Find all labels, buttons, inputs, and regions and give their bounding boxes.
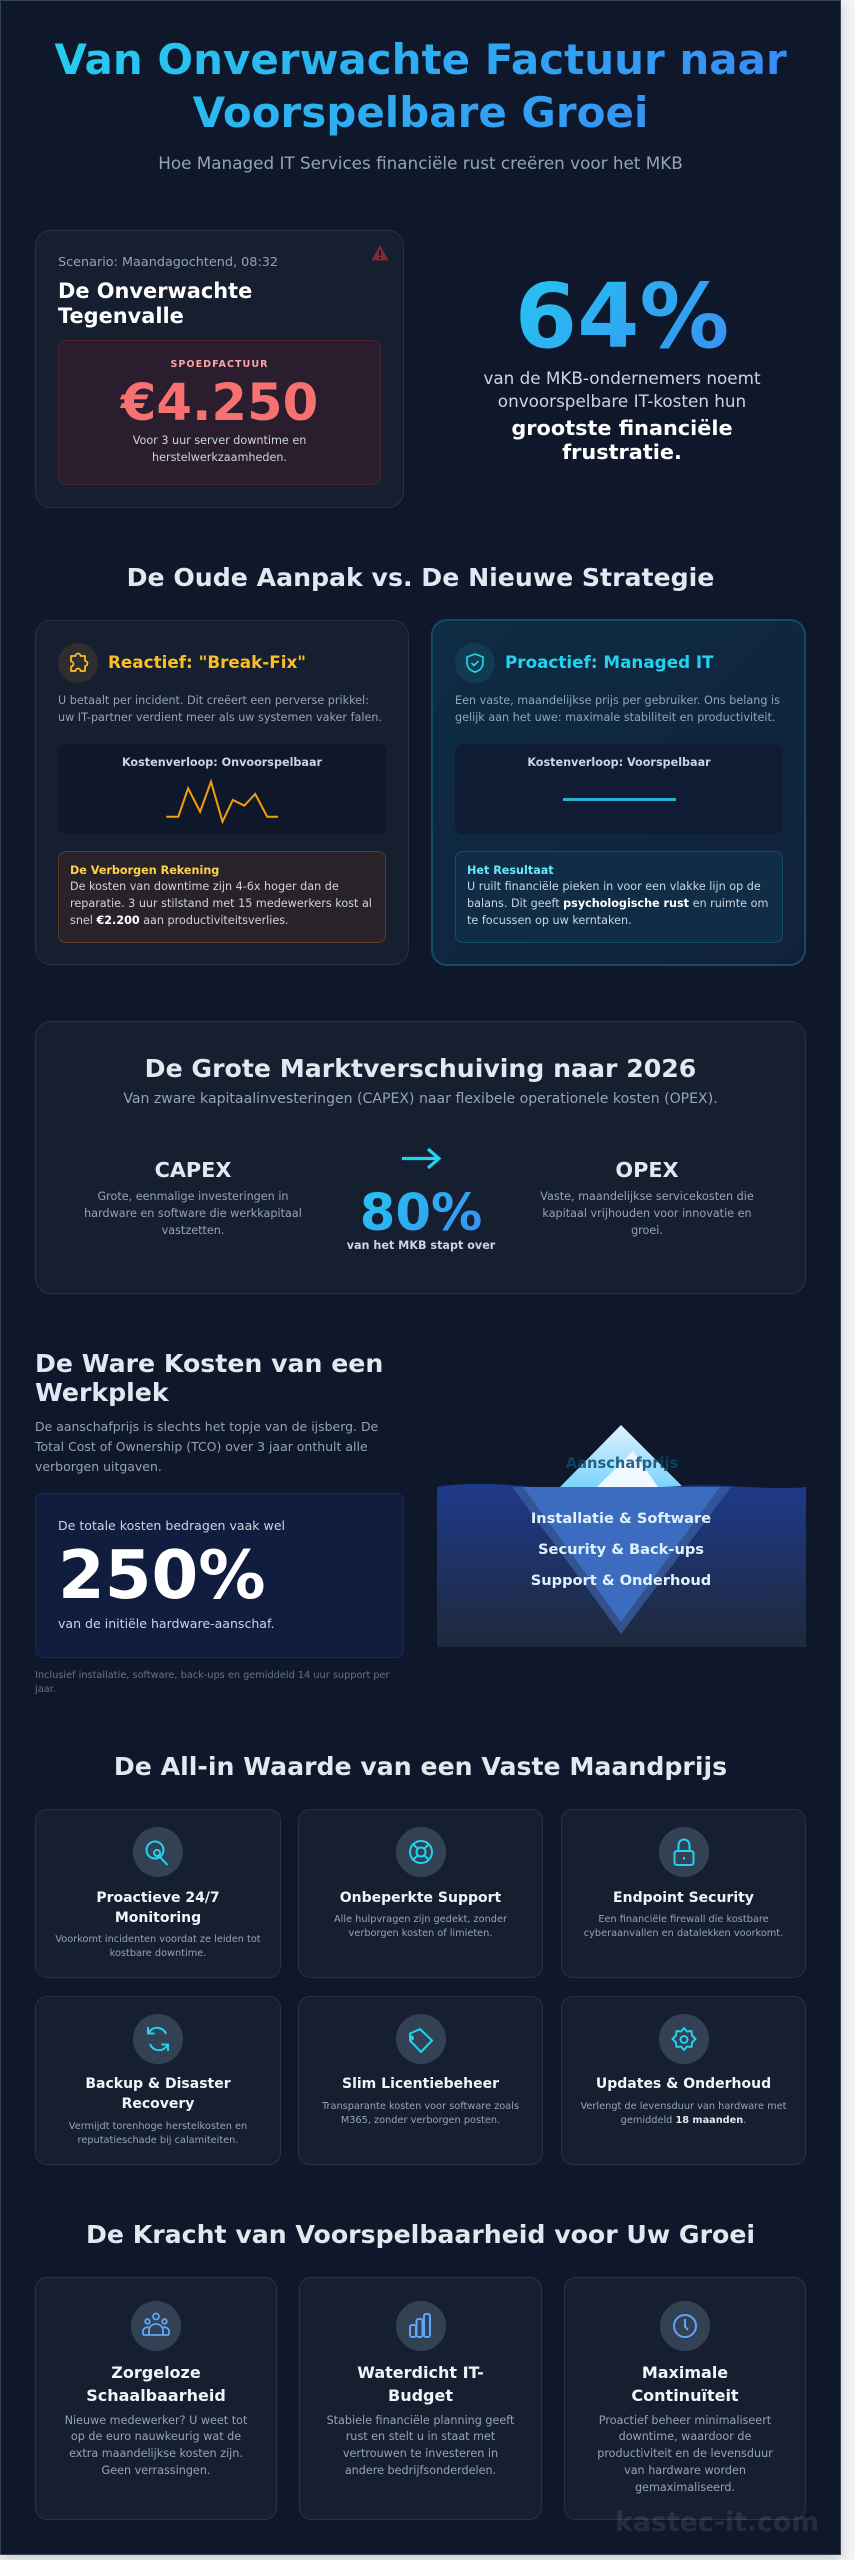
heading: true workplace cost	[35, 1349, 383, 1407]
description: Geen verrassingen.	[102, 2464, 210, 2477]
title	[96, 1890, 220, 1926]
description	[55, 1934, 261, 1959]
description: Verlengt de levensduur van hardware met	[581, 2101, 786, 2112]
title: Recovery	[122, 2096, 194, 2112]
result callout	[455, 851, 783, 943]
callout text	[70, 864, 372, 927]
callout text: De Verborgen Rekening	[70, 864, 219, 876]
CAPEX text: vastzetten.	[162, 1224, 224, 1237]
panel: market shift	[35, 1021, 806, 1294]
description: verborgen kosten of limieten.	[349, 1928, 492, 1939]
card: continuity	[564, 2277, 806, 2520]
description	[65, 2414, 248, 2477]
flat line	[563, 798, 676, 801]
card: budget	[299, 2277, 542, 2520]
description	[68, 2121, 247, 2146]
description	[322, 2101, 519, 2126]
watermark: kastec-it.com	[615, 2507, 819, 2538]
cost chart: unpredictable	[58, 744, 386, 834]
stat text: onvoorspelbare IT-kosten hun	[498, 391, 746, 411]
icon: magnifier	[133, 1827, 183, 1877]
reactive description	[58, 694, 382, 724]
title: Maximale	[642, 2363, 728, 2382]
subtitle: Hoe Managed IT Services financiële rust creëren voor het MKB	[158, 153, 683, 173]
description: extra maandelijkse kosten zijn.	[69, 2447, 243, 2460]
title: Waterdicht IT-	[357, 2363, 484, 2382]
iceberg labels: Support & Onderhoud	[531, 1572, 711, 1589]
description: reputatieschade bij calamiteiten.	[78, 2135, 238, 2146]
arrow	[402, 1148, 441, 1170]
title: Backup & Disaster	[85, 2076, 231, 2092]
callout text: balans. Dit geeft psychologische rust en ruimte om	[467, 897, 768, 910]
callout text: U ruilt financiële pieken in voor een vlakke lijn op de	[467, 880, 761, 893]
panel: 250 percent	[35, 1493, 404, 1658]
invoice note	[132, 434, 306, 464]
description: kostbare downtime.	[110, 1948, 206, 1959]
description: Voorkomt incidenten voordat ze leiden tot	[55, 1934, 261, 1945]
CAPEX text	[84, 1190, 302, 1237]
reactive title: Reactief: "Break-Fix"	[108, 652, 306, 672]
title	[631, 2363, 739, 2404]
card: scalability	[35, 2277, 277, 2520]
title	[357, 2363, 484, 2404]
iceberg labels: Security & Back-ups	[538, 1541, 704, 1558]
80 percent stat: 80%	[360, 1183, 482, 1243]
scenario label: Scenario: Maandagochtend, 08:32	[58, 255, 278, 270]
callout text: snel €2.200 aan productiviteitsverlies.	[70, 914, 289, 927]
card: support	[298, 1809, 543, 1978]
reactive description: uw IT-partner verdient meer als uw systemen vaker falen.	[58, 711, 382, 724]
TCO description: Total Cost of Ownership (TCO) over 3 jaar onthult alle	[35, 1439, 368, 1454]
footnote: Inclusief installatie, software, back-ups en gemiddeld 14 uur support per	[35, 1670, 390, 1681]
stat emphasis	[511, 416, 733, 464]
proactive title: Proactief: Managed IT	[505, 652, 714, 672]
chart label: Kostenverloop: Voorspelbaar	[527, 756, 711, 769]
icon: puzzle	[58, 643, 98, 683]
proactive description: Een vaste, maandelijkse prijs per gebruiker. Ons belang is	[455, 694, 780, 707]
big number	[451, 259, 793, 375]
proactive description	[455, 694, 780, 724]
description	[597, 2414, 773, 2494]
icon: tag	[396, 2014, 446, 2064]
description: Transparante kosten voor software zoals	[322, 2101, 519, 2112]
description: op de euro nauwkeurig wat de	[71, 2430, 241, 2443]
description: vertrouwen te investeren in	[343, 2447, 498, 2460]
statistic: 64 percent	[483, 265, 761, 464]
heading: true workplace cost: De Ware Kosten van een	[35, 1349, 383, 1378]
cost chart: predictable	[455, 744, 783, 834]
stat emphasis: grootste financiële	[511, 416, 733, 440]
card heading: De Onverwachte	[58, 278, 252, 302]
callout text: te focussen op uw kerntaken.	[467, 914, 632, 927]
title: Slim Licentiebeheer	[342, 2076, 499, 2092]
OPEX text: groei.	[631, 1224, 663, 1237]
card: backup	[35, 1996, 281, 2165]
stat text: van de MKB-ondernemers noemt	[483, 368, 761, 388]
title: Zorgeloze	[111, 2363, 201, 2382]
OPEX text	[540, 1190, 754, 1237]
invoice amount: €4.250	[121, 373, 318, 433]
lead text: De totale kosten bedragen vaak wel	[58, 1518, 285, 1533]
OPEX text: Vaste, maandelijkse servicekosten die	[540, 1190, 754, 1203]
big number: 250%	[58, 1536, 266, 1614]
heading: old vs new: De Oude Aanpak vs. De Nieuwe Strategie	[127, 563, 714, 592]
CAPEX column	[84, 1158, 302, 1237]
icon: refresh	[133, 2014, 183, 2064]
callout text: De kosten van downtime zijn 4-6x hoger dan de	[70, 880, 339, 893]
description: Nieuwe medewerker? U weet tot	[65, 2414, 247, 2427]
description	[584, 1914, 783, 1939]
follow text: van de initiële hardware-aanschaf.	[58, 1616, 274, 1631]
description: Alle hulpvragen zijn gedekt, zonder	[334, 1914, 507, 1925]
description: gemaximaliseerd.	[635, 2481, 735, 2494]
reactive description: U betaalt per incident. Dit creëert een perverse prikkel:	[58, 694, 369, 707]
invoice note: herstelwerkzaamheden.	[152, 451, 287, 464]
spiky line	[166, 778, 278, 824]
footnote	[34, 1670, 390, 1695]
iceberg labels	[531, 1455, 711, 1589]
icon: warning triangle	[372, 245, 388, 260]
title: Voorspelbare Groei	[193, 88, 648, 137]
title: Continuïteit	[631, 2386, 739, 2404]
TCO description: verborgen uitgaven.	[35, 1459, 162, 1474]
TCO description	[34, 1419, 378, 1474]
card: updates	[561, 1996, 806, 2165]
80 percent stat	[321, 1179, 521, 1247]
CAPEX text: Grote, eenmalige investeringen in	[97, 1190, 289, 1203]
iceberg labels: Aanschafprijs	[566, 1455, 679, 1472]
OPEX column	[540, 1158, 754, 1237]
title: Proactieve 24/7	[96, 1890, 220, 1906]
invoice note: Voor 3 uur server downtime en	[133, 434, 306, 447]
footnote: jaar.	[35, 1684, 56, 1695]
invoice label: SPOEDFACTUUR	[170, 359, 269, 370]
description: andere bedrijfsonderdelen.	[345, 2464, 496, 2477]
subheading: Van zware kapitaalinvesteringen (CAPEX) naar flexibele operationele kosten (OPEX).	[123, 1091, 718, 1107]
title: Van Onverwachte Factuur naar	[54, 35, 787, 84]
stat caption: van het MKB stapt over	[347, 1239, 495, 1252]
card: endpoint security	[561, 1809, 806, 1978]
heading: De Grote Marktverschuiving naar 2026	[145, 1054, 696, 1083]
heading: true workplace cost: Werkplek	[35, 1378, 169, 1407]
icon: shield	[455, 643, 495, 683]
heading: all-in value: De All-in Waarde van een Vaste Maandprijs	[114, 1752, 727, 1781]
title: Schaalbaarheid	[86, 2386, 226, 2404]
card: licences	[298, 1996, 543, 2165]
OPEX text: kapitaal vrijhouden voor innovatie en	[542, 1207, 752, 1220]
icon: padlock	[659, 1827, 709, 1877]
title: Updates & Onderhoud	[596, 2076, 771, 2092]
icon: gear	[659, 2014, 709, 2064]
description	[580, 2101, 786, 2126]
callout text: Het Resultaat	[467, 864, 554, 876]
card: monitoring	[35, 1809, 281, 1978]
description	[334, 1914, 507, 1939]
description: rust en stelt u in staat met	[346, 2430, 495, 2443]
callout text: reparatie. 3 uur stilstand met 15 medewerkers kost al	[70, 897, 372, 910]
emergency invoice box	[58, 340, 381, 485]
iceberg labels: Installatie & Software	[531, 1510, 711, 1527]
title: Onbeperkte Support	[340, 1890, 501, 1906]
panel: proactive	[431, 619, 806, 966]
description	[327, 2414, 514, 2477]
icon: clock	[660, 2301, 710, 2351]
panel: reactive	[35, 620, 409, 965]
title: Endpoint Security	[613, 1890, 754, 1906]
iceberg graphic	[437, 1425, 806, 1647]
description: van hardware worden	[624, 2464, 746, 2477]
title	[0, 33, 841, 139]
description: productiviteit en de levensduur	[597, 2447, 773, 2460]
description: Stabiele financiële planning geeft	[327, 2414, 514, 2427]
chart label: Kostenverloop: Onvoorspelbaar	[122, 756, 322, 769]
icon: team	[131, 2301, 181, 2351]
title: Monitoring	[115, 1910, 201, 1926]
description: Vermijdt torenhoge herstelkosten en	[69, 2121, 247, 2132]
card heading	[58, 278, 252, 328]
title: Budget	[388, 2386, 453, 2404]
description: M365, zonder verborgen posten.	[341, 2115, 500, 2126]
title	[85, 2076, 231, 2112]
OPEX title: OPEX	[615, 1158, 679, 1182]
description: Een financiële firewall die kostbare	[598, 1914, 769, 1925]
big number: 64%	[515, 265, 729, 369]
TCO description: De aanschafprijs is slechts het topje van de ijsberg. De	[35, 1419, 378, 1434]
title	[86, 2363, 226, 2404]
CAPEX title: CAPEX	[155, 1158, 231, 1182]
description: downtime, waardoor de	[619, 2430, 751, 2443]
stat text	[483, 368, 761, 411]
heading: power of predictability: De Kracht van Voorspelbaarheid voor Uw Groei	[86, 2220, 755, 2249]
panel: unexpected setback	[35, 230, 404, 508]
description: Proactief beheer minimaliseert	[599, 2414, 771, 2427]
proactive description: gelijk aan het uwe: maximale stabiliteit en productiviteit.	[455, 711, 775, 724]
description: gemiddeld 18 maanden.	[621, 2115, 746, 2126]
CAPEX text: hardware en software die werkkapitaal	[84, 1207, 302, 1220]
icon: bars	[396, 2301, 446, 2351]
icon: lifebuoy	[396, 1827, 446, 1877]
card heading: Tegenvalle	[58, 304, 184, 328]
callout text	[467, 864, 768, 927]
hidden bill callout	[58, 851, 386, 943]
description: cyberaanvallen en datalekken voorkomt.	[584, 1928, 783, 1939]
stat emphasis: frustratie.	[562, 440, 682, 464]
